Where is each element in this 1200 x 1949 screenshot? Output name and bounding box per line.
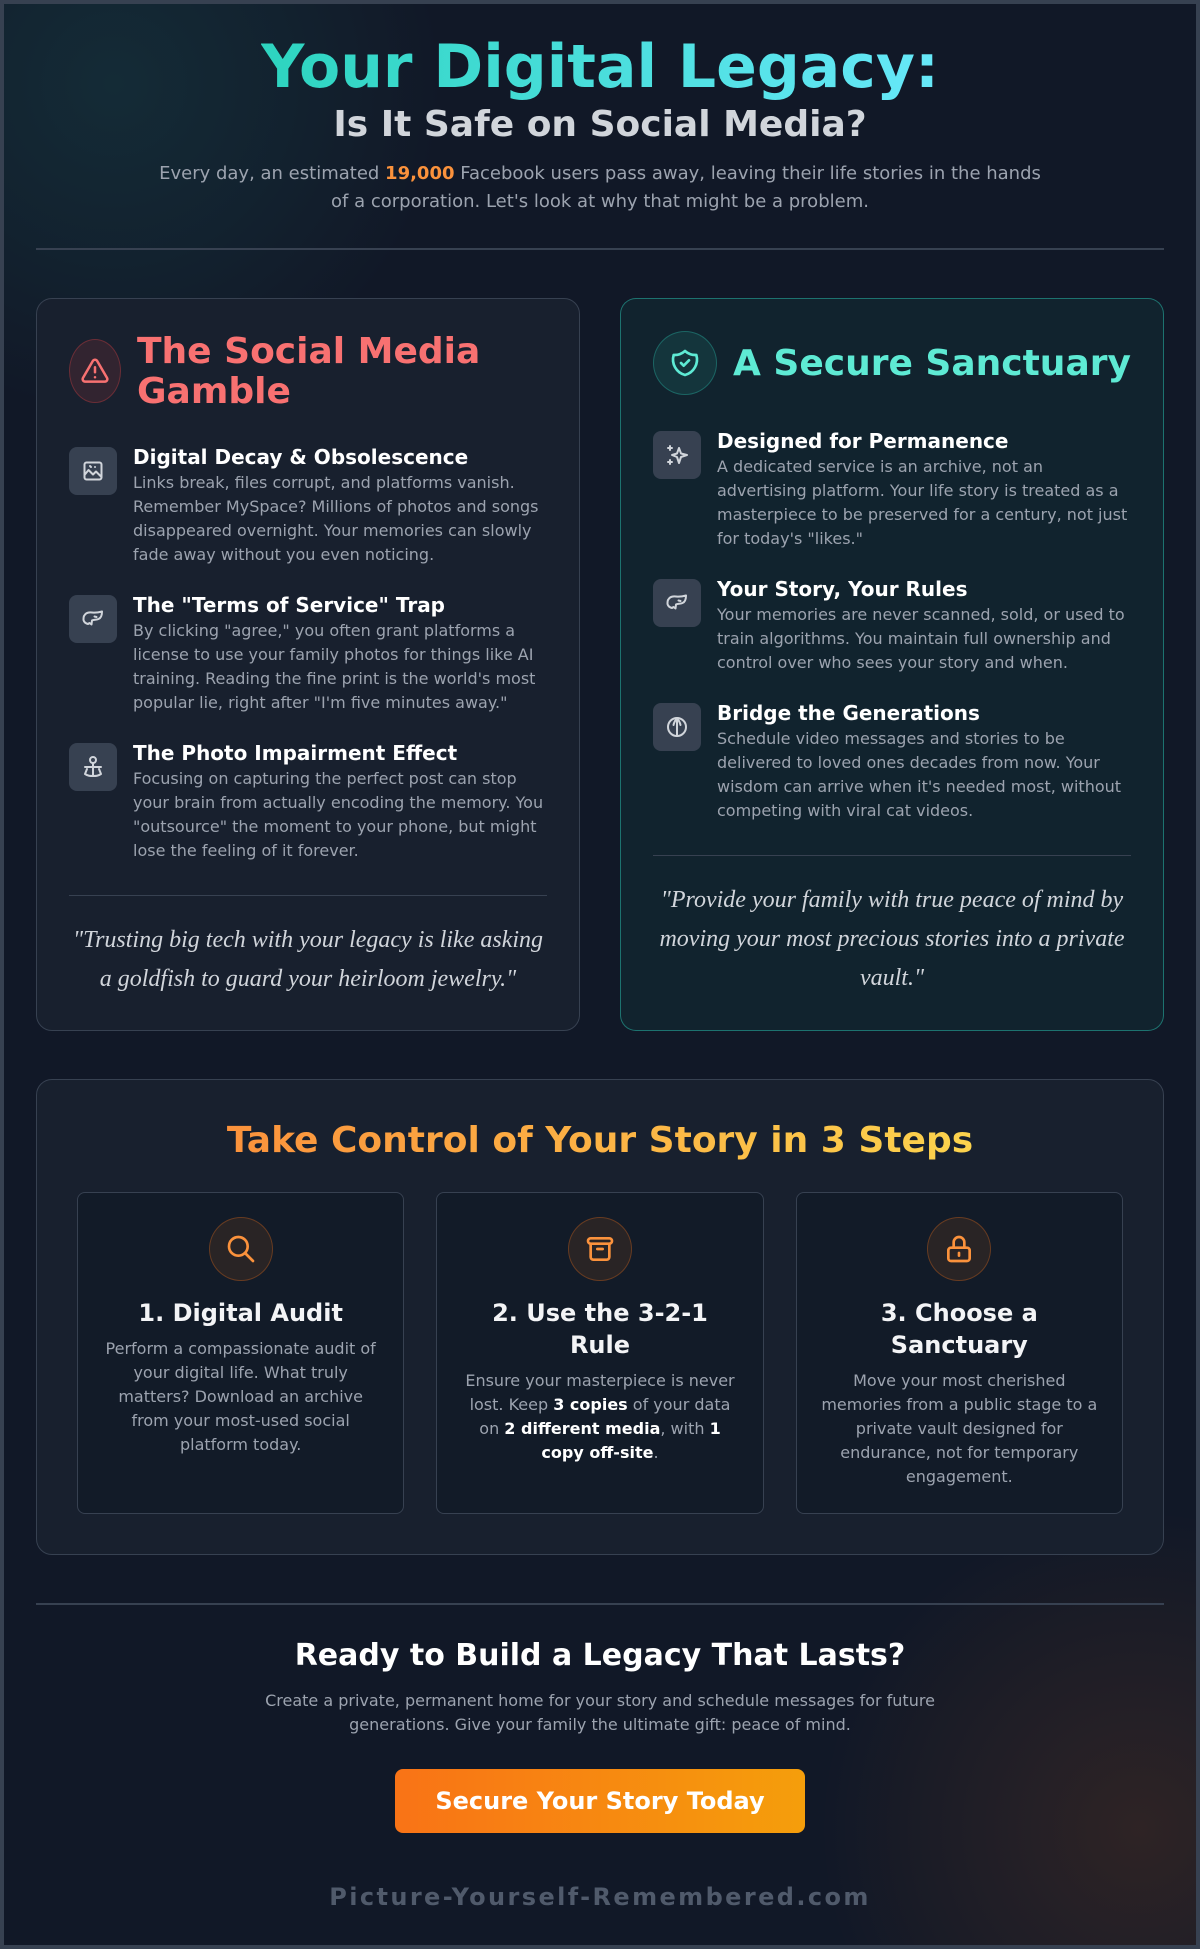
step title: 1. Digital Audit: [138, 1299, 343, 1327]
intro text: [159, 163, 1041, 212]
call to action text: [265, 1691, 935, 1734]
step title: [881, 1299, 1038, 1359]
icon: archive: [568, 1217, 632, 1281]
item text: "outsource" the moment to your phone, but might: [133, 817, 536, 836]
item text: By clicking "agree," you often grant platforms a: [133, 621, 515, 640]
icon: broken image: [69, 447, 117, 495]
item text: Links break, files corrupt, and platforms vanish.: [133, 473, 515, 492]
step text: lost. Keep 3 copies of your data: [470, 1395, 730, 1414]
step title: [492, 1299, 708, 1359]
item text: competing with viral cat videos.: [717, 801, 973, 820]
step text: platform today.: [180, 1435, 301, 1454]
step text: Perform a compassionate audit of: [106, 1339, 376, 1358]
item text: [717, 605, 1125, 672]
step text: memories from a public stage to a: [821, 1395, 1097, 1414]
step text: endurance, not for temporary: [840, 1443, 1078, 1462]
panel heading: The Social Media: [137, 331, 480, 372]
item title: Designed for Permanence: [717, 429, 1008, 453]
step card 3: [796, 1192, 1123, 1514]
icon: story: [653, 579, 701, 627]
button: [395, 1769, 805, 1833]
step card 1: [77, 1192, 404, 1514]
item title: The Photo Impairment Effect: [133, 741, 457, 765]
quote: [73, 927, 543, 992]
step text: [106, 1339, 376, 1454]
icon: shield: [653, 331, 717, 395]
item text: [133, 473, 538, 564]
quote: a goldfish to guard your heirloom jewelry.": [100, 966, 516, 992]
step text: Move your most cherished: [853, 1371, 1066, 1390]
icon: warning: [69, 339, 121, 403]
quote: "Trusting big tech with your legacy is like asking: [73, 927, 543, 953]
step text: on 2 different media, with 1: [479, 1419, 721, 1438]
step text: your digital life. What truly: [133, 1363, 348, 1382]
item text: advertising platform. Your life story is treated as a: [717, 481, 1119, 500]
item text: masterpiece to be preserved for a century, not just: [717, 505, 1127, 524]
step text: Ensure your masterpiece is never: [465, 1371, 735, 1390]
item title: Bridge the Generations: [717, 701, 980, 725]
quote: [659, 887, 1125, 991]
item text: [717, 729, 1121, 820]
call to action heading: Ready to Build a Legacy That Lasts?: [295, 1638, 905, 1673]
website footer: Picture-Yourself-Remembered.com: [329, 1883, 871, 1911]
step text: private vault designed for: [856, 1419, 1063, 1438]
subtitle: Is It Safe on Social Media?: [333, 104, 867, 145]
item text: disappeared overnight. Your memories can slowly: [133, 521, 531, 540]
intro text: of a corporation. Let's look at why that might be a problem.: [331, 191, 869, 212]
item text: delivered to loved ones decades from now. Your: [717, 753, 1100, 772]
step title: Sanctuary: [891, 1331, 1028, 1359]
icon: anchor: [69, 743, 117, 791]
item text: Your memories are never scanned, sold, or used to: [717, 605, 1125, 624]
step card 2: [436, 1192, 764, 1514]
item text: popular lie, right after "I'm five minutes away.": [133, 693, 507, 712]
step text: copy off-site.: [541, 1443, 659, 1462]
item text: Remember MySpace? Millions of photos and songs: [133, 497, 538, 516]
header: [159, 32, 1041, 212]
item text: A dedicated service is an archive, not an: [717, 457, 1043, 476]
panel: the social media gamble: [36, 298, 580, 1031]
item text: control over who sees your story and when.: [717, 653, 1068, 672]
step title: 2. Use the 3-2-1: [492, 1299, 708, 1327]
title: Your Digital Legacy:: [261, 32, 939, 102]
step text: [821, 1371, 1097, 1486]
call to action text: generations. Give your family the ultimate gift: peace of mind.: [349, 1715, 851, 1734]
item text: train algorithms. You maintain full ownership and: [717, 629, 1111, 648]
step title: 3. Choose a: [881, 1299, 1038, 1327]
intro text: Every day, an estimated 19,000 Facebook users pass away, leaving their life stories in the hands: [159, 163, 1041, 184]
icon: search: [209, 1217, 273, 1281]
item title: The "Terms of Service" Trap: [133, 593, 445, 617]
panel: take control steps: [36, 1079, 1164, 1555]
button: Secure Your Story Today: [435, 1787, 765, 1815]
quote: "Provide your family with true peace of mind by: [661, 887, 1123, 913]
item text: Focusing on capturing the perfect post can stop: [133, 769, 517, 788]
item text: wisdom can arrive when it's needed most, without: [717, 777, 1121, 796]
icon: terms trap: [69, 595, 117, 643]
panel heading: A Secure Sanctuary: [733, 343, 1131, 384]
panel: a secure sanctuary: [620, 298, 1164, 1031]
item text: for today's "likes.": [717, 529, 863, 548]
item text: fade away without you even noticing.: [133, 545, 434, 564]
step title: Rule: [570, 1331, 630, 1359]
item text: [133, 621, 535, 712]
item text: lose the feeling of it forever.: [133, 841, 359, 860]
quote: moving your most precious stories into a private: [659, 926, 1125, 952]
step text: engagement.: [906, 1467, 1013, 1486]
step text: matters? Download an archive: [118, 1387, 363, 1406]
call to action text: Create a private, permanent home for your story and schedule messages for future: [265, 1691, 935, 1710]
item text: Schedule video messages and stories to be: [717, 729, 1065, 748]
step text: from your most-used social: [132, 1411, 350, 1430]
icon: lock: [927, 1217, 991, 1281]
icon: bridge: [653, 703, 701, 751]
panel heading: Gamble: [137, 371, 291, 412]
item text: training. Reading the fine print is the world's most: [133, 669, 535, 688]
item text: your brain from actually encoding the memory. You: [133, 793, 543, 812]
quote: vault.": [860, 965, 924, 991]
panel heading: [137, 331, 480, 412]
step text: [465, 1371, 735, 1462]
item text: [133, 769, 543, 860]
item title: Digital Decay & Obsolescence: [133, 445, 468, 469]
item title: Your Story, Your Rules: [717, 577, 967, 601]
item text: [717, 457, 1127, 548]
steps heading: Take Control of Your Story in 3 Steps: [227, 1120, 973, 1161]
item text: license to use your family photos for things like AI: [133, 645, 533, 664]
icon: sparkles: [653, 431, 701, 479]
